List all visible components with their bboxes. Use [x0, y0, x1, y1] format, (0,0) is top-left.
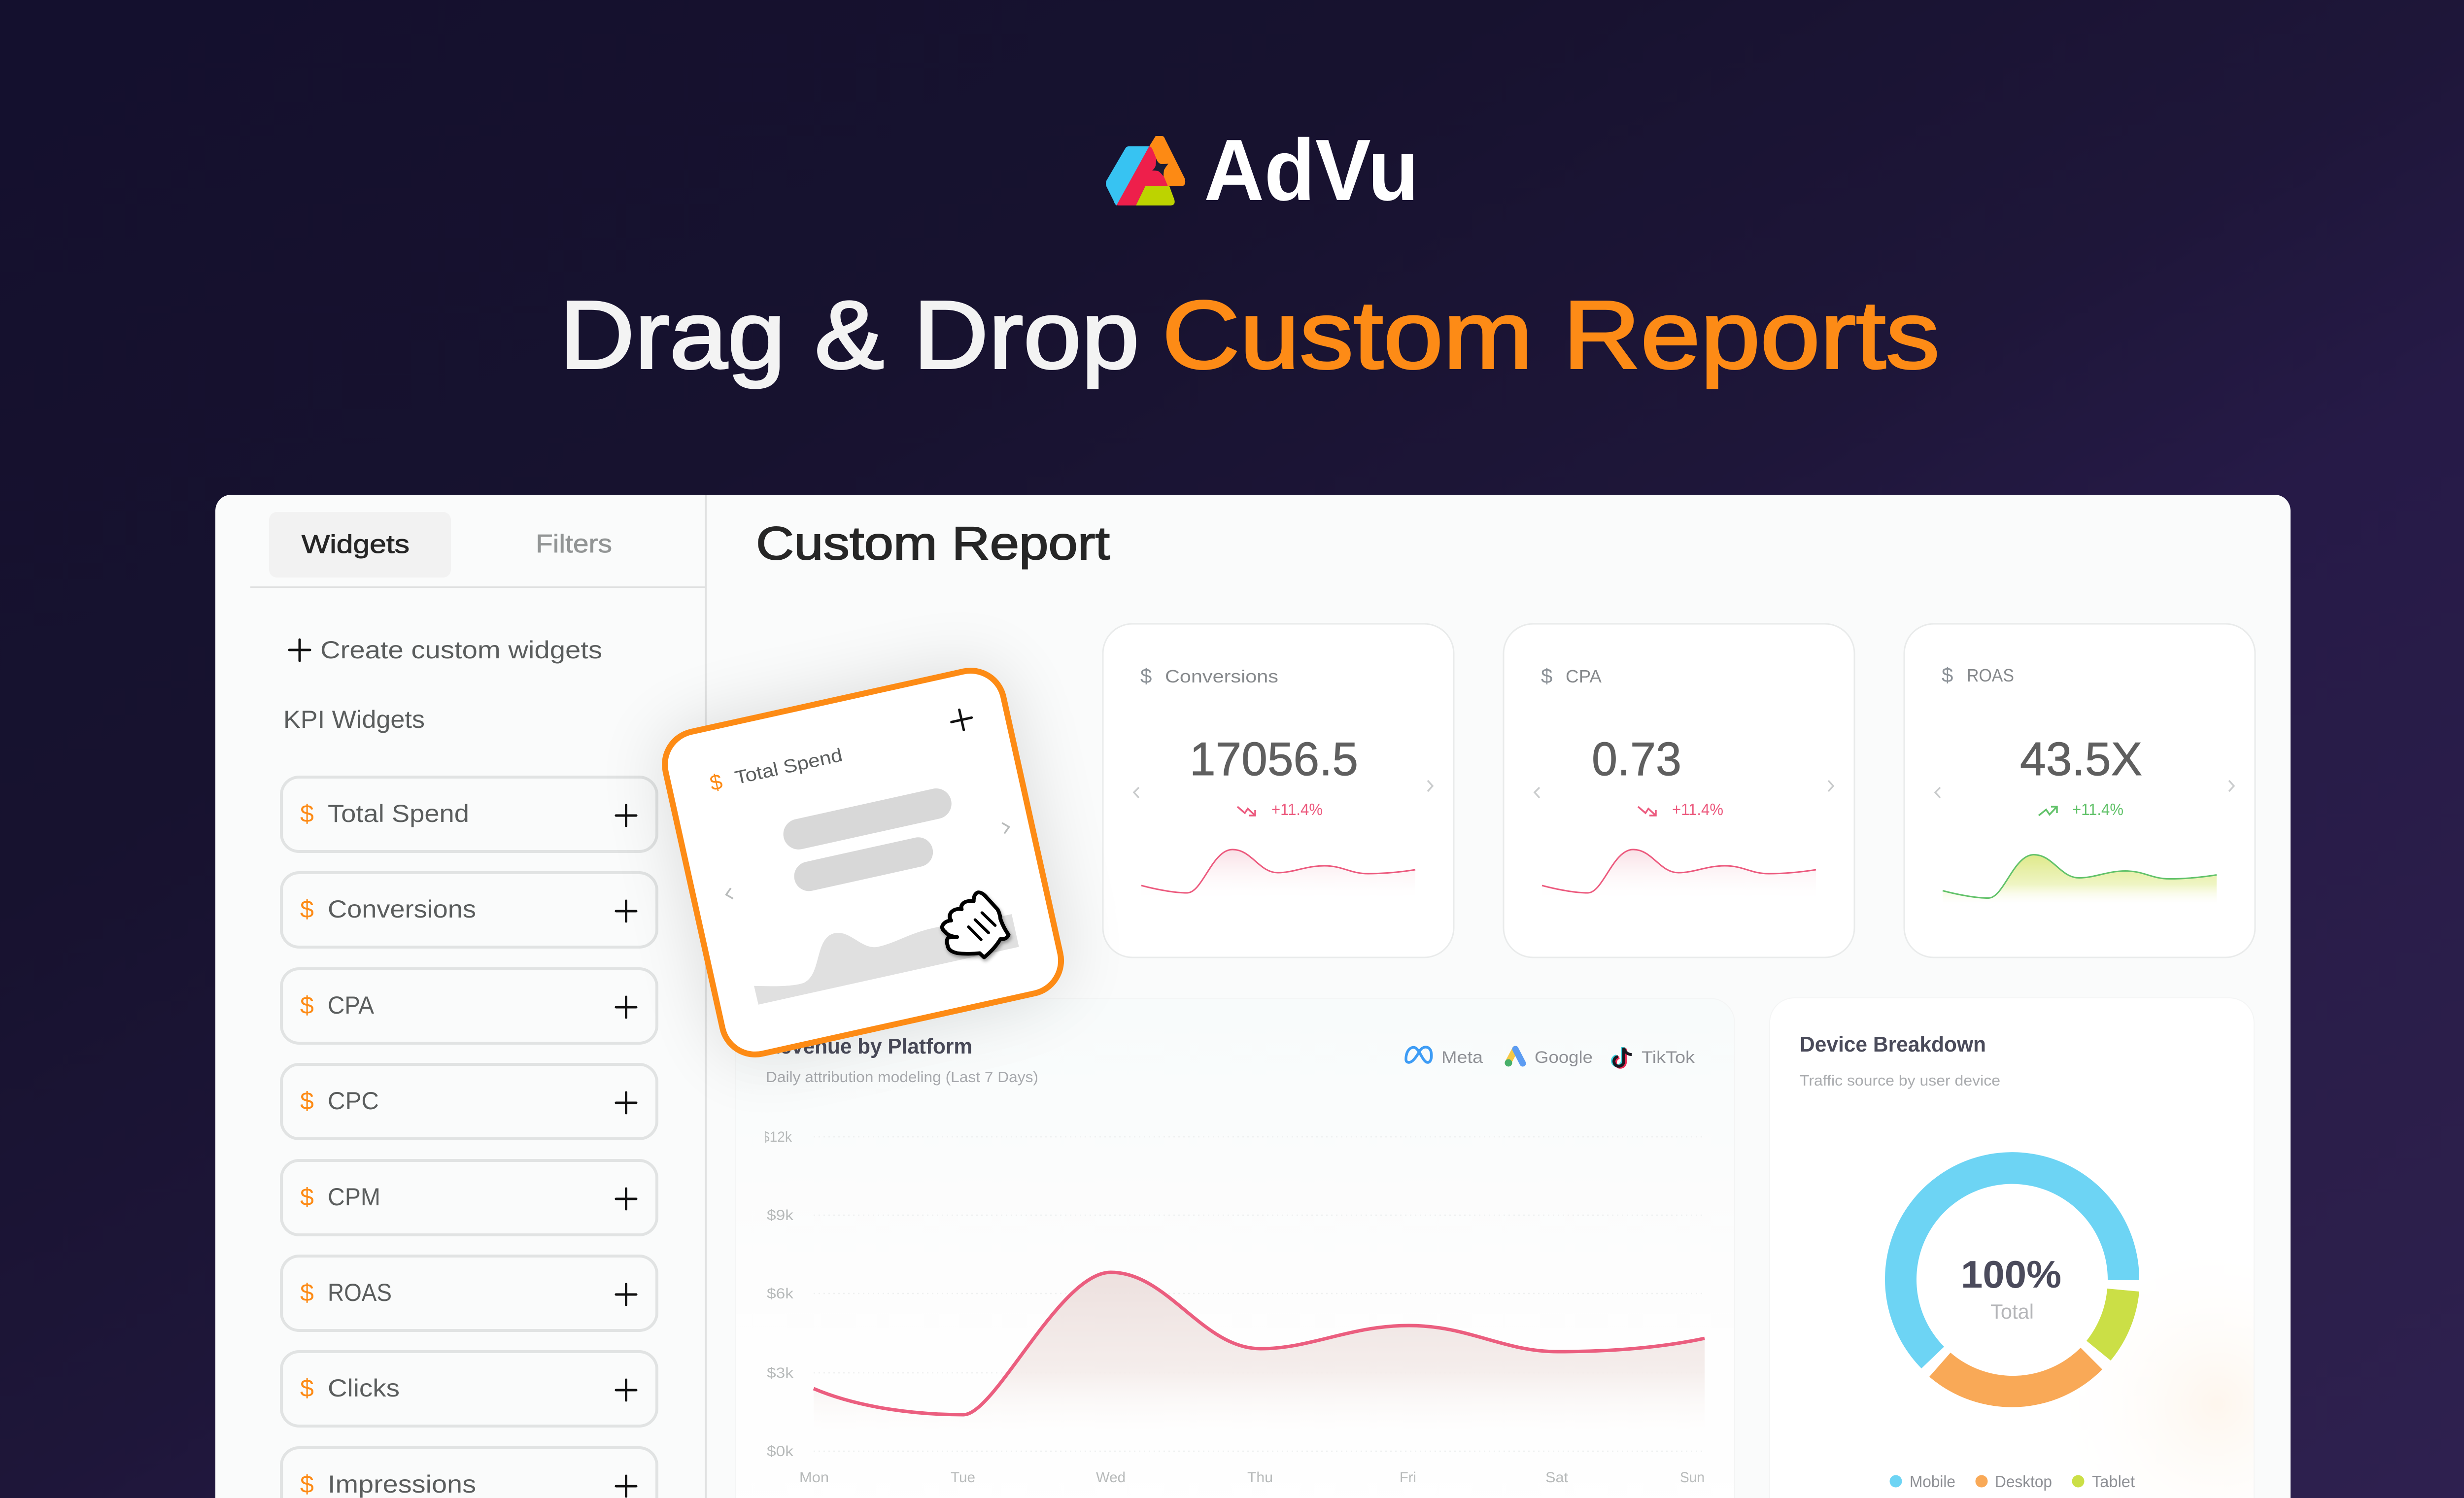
widget item: CPM: $: [300, 1183, 314, 1211]
widget item: CPA: CPA: [328, 991, 375, 1019]
widget item: CPM: [281, 1160, 657, 1235]
KPI card: conversions: Conversions: [1165, 666, 1278, 686]
KPI card: conversions: 17056.5: [1190, 733, 1358, 785]
panel: report builder window: [215, 495, 2291, 1498]
widget item: impressions: Impressions: [328, 1470, 476, 1498]
widget item: conversions: $: [300, 895, 314, 923]
donut legend: Tablet: [2092, 1472, 2135, 1491]
dragged widget card: total spend: Total Spend: [733, 745, 844, 789]
subheading: Traffic source by user device: [1800, 1072, 2000, 1089]
heading: device breakdown: Device Breakdown: [1800, 1032, 1986, 1056]
platform legend: [1406, 1047, 1695, 1067]
KPI card: conversions: [1103, 624, 1454, 957]
widget item: total spend: Total Spend: [328, 800, 469, 827]
logo: AdVu: [1106, 121, 1419, 219]
x axis labels: Sun: [1680, 1469, 1705, 1486]
KPI card: ROAS: [1904, 624, 2255, 957]
widget item: impressions: [281, 1448, 657, 1498]
widget item: CPM: CPM: [328, 1183, 380, 1211]
KPI card: ROAS: ROAS: [1967, 665, 2014, 685]
create custom widgets: Create custom widgets: [320, 636, 602, 664]
tab: widgets: Widgets: [302, 530, 410, 559]
platform legend: Google: [1535, 1048, 1593, 1067]
widget item: CPA: $: [300, 991, 314, 1019]
x axis labels: Fri: [1400, 1469, 1416, 1486]
heading: KPI widgets: KPI Widgets: [283, 706, 425, 733]
KPI card: ROAS: +11.4%: [2072, 800, 2123, 818]
icon: grabbing hand cursor: [942, 892, 1009, 957]
title: Custom Reports: [1162, 281, 1940, 389]
panel: revenue by platform: [736, 998, 1735, 1498]
widget item: conversions: Conversions: [328, 895, 476, 923]
platform legend: Meta: [1441, 1048, 1483, 1067]
donut chart: [1885, 1152, 2139, 1407]
title: Drag & Drop: [559, 281, 1139, 389]
y axis labels: [762, 1129, 794, 1460]
donut legend: Desktop: [1995, 1472, 2052, 1491]
dragged widget card: total spend: $: [708, 770, 724, 796]
subheading: Daily attribution modeling (Last 7 Days): [766, 1068, 1038, 1086]
widget item: ROAS: ROAS: [328, 1279, 392, 1306]
widget item: conversions: [281, 873, 657, 947]
KPI card: CPA: +11.4%: [1672, 800, 1723, 818]
KPI card: ROAS: 43.5X: [2020, 733, 2142, 785]
x axis labels: [799, 1469, 1705, 1486]
KPI card: conversions: +11.4%: [1271, 800, 1323, 818]
widget item: CPA: [281, 969, 657, 1043]
y axis labels: $6k: [767, 1286, 794, 1302]
logo wordmark: AdVu: [1204, 121, 1419, 219]
tab: widgets: [269, 512, 451, 578]
widget item: ROAS: [281, 1256, 657, 1330]
line chart: revenue: [762, 1129, 1705, 1486]
KPI card: CPA: CPA: [1566, 666, 1602, 686]
y axis labels: $3k: [767, 1365, 794, 1381]
heading: custom report: Custom Report: [756, 517, 1110, 570]
widget item: total spend: $: [300, 800, 314, 827]
x axis labels: Mon: [799, 1469, 829, 1486]
x axis labels: Wed: [1096, 1469, 1126, 1486]
title: [559, 281, 1940, 389]
KPI card: conversions: $: [1140, 664, 1152, 687]
dragged widget card: total spend: [655, 661, 1071, 1064]
sidebar: [250, 495, 707, 1498]
heading: revenue by platform: Revenue by Platform: [765, 1034, 972, 1058]
KPI card: CPA: [1504, 624, 1854, 957]
KPI card: CPA: $: [1541, 664, 1552, 687]
widget item: CPC: CPC: [328, 1087, 379, 1115]
donut chart: 100%: [1961, 1253, 2061, 1296]
widget item: clicks: [281, 1352, 657, 1426]
widget item: total spend: [281, 777, 657, 851]
widget item: CPC: $: [300, 1087, 314, 1115]
tab: filters: Filters: [536, 530, 612, 558]
widget item: clicks: Clicks: [328, 1374, 400, 1402]
platform legend: TikTok: [1642, 1048, 1695, 1067]
widget item: CPC: [281, 1064, 657, 1139]
y axis labels: $0k: [767, 1443, 794, 1460]
donut legend: Mobile: [1910, 1472, 1955, 1491]
KPI card: CPA: 0.73: [1592, 733, 1681, 785]
logo icon: [1106, 136, 1185, 205]
widget item: ROAS: $: [300, 1279, 314, 1306]
panel: device breakdown: [1770, 998, 2254, 1498]
KPI card: ROAS: $: [1942, 663, 1953, 686]
x axis labels: Thu: [1247, 1469, 1273, 1486]
widget item: impressions: $: [300, 1470, 314, 1498]
widget item: clicks: $: [300, 1374, 314, 1402]
y axis labels: $12k: [762, 1129, 792, 1145]
x axis labels: Tue: [951, 1469, 975, 1486]
y axis labels: $9k: [767, 1207, 794, 1224]
donut legend: [1889, 1472, 2135, 1491]
x axis labels: Sat: [1545, 1469, 1569, 1486]
donut chart: Total: [1990, 1300, 2034, 1323]
